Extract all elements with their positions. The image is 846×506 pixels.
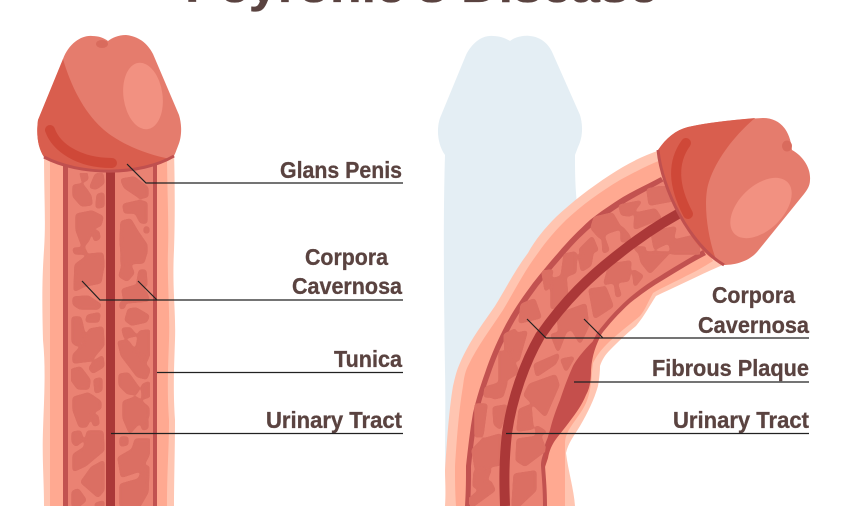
label: glans penis: Glans Penis [280,157,402,183]
label: urinary tract right: Urinary Tract [673,407,809,433]
curved corpora blobs [469,186,700,506]
label: corpora cavernosa left: Corpora [305,244,388,270]
curved inner skin [455,160,713,506]
tunica [63,150,157,506]
curved outer skin [445,150,723,506]
glans shadow side [37,59,170,172]
curved glans rim [658,150,724,265]
corpora blobs [71,173,150,506]
glans band [50,130,112,163]
label: corpora cavernosa right: Cavernosa [698,312,809,338]
label: corpora cavernosa left: Cavernosa [292,273,402,299]
corpora tissue [68,150,153,506]
label: tunica: Tunica [334,346,402,372]
curved meatus [782,140,792,152]
label: corpora cavernosa left [82,244,403,300]
shaft inner skin [50,150,169,506]
curved urethra [504,205,695,506]
illustration: curved anatomy [445,118,810,506]
curved glans shadow side [658,118,755,262]
glans highlight [123,62,163,130]
silhouette: original shape [438,36,582,490]
label: corpora cavernosa right: Corpora [712,282,795,308]
curved glans band [676,143,688,214]
curved glans highlight [730,178,792,238]
glans [37,35,181,172]
label: urinary tract left: Urinary Tract [266,407,402,433]
curved glans [658,118,810,265]
meatus [96,40,108,48]
label: glans penis [127,157,403,183]
label: corpora cavernosa right [527,282,809,338]
fibrous plaque [544,333,602,470]
label: fibrous plaque: Fibrous Plaque [652,355,809,381]
illustration: healthy anatomy [37,35,181,506]
curved corpora tissue [470,181,703,506]
shaft outer skin [42,150,175,506]
curved tunica [465,177,706,506]
glans rim [44,156,174,171]
urethra [106,150,115,506]
